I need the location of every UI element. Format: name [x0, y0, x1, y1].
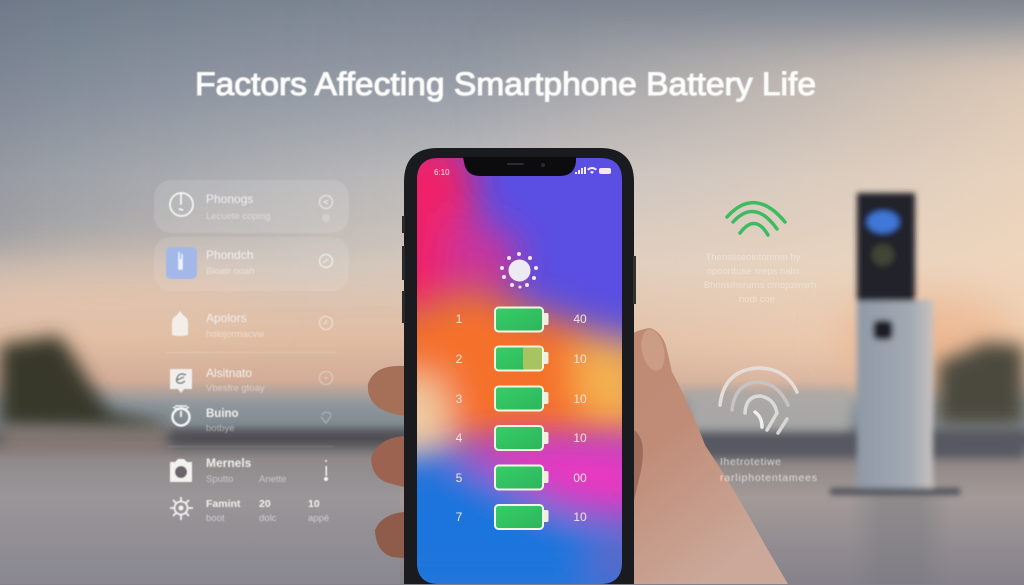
panel: row 1: Lecuete coping: [206, 211, 270, 222]
phone screen gradient: [417, 158, 622, 584]
icon: contactless waves: [720, 368, 797, 433]
row 7: appé: [308, 513, 329, 524]
row 6: Anette: [259, 474, 286, 485]
icon: power gauge: [170, 193, 193, 216]
row 5: [172, 406, 331, 434]
text block: right lower caption: rarliphotentamees: [720, 472, 817, 484]
battery row 5: [456, 466, 587, 490]
row 5: Buino: [206, 408, 239, 420]
battery row 3: [456, 386, 587, 410]
panel: left factor list: [154, 180, 349, 524]
battery row 1: 1: [456, 312, 463, 326]
battery row 3: 10: [573, 392, 587, 406]
battery row 5: 5: [456, 471, 463, 485]
row 3: holojormacvw: [206, 329, 264, 340]
row 6: [170, 456, 328, 485]
icon: camera: [170, 459, 192, 482]
battery row 2: 2: [456, 352, 463, 366]
text block: right description: Bhonsihsrurns cmopzmsrh: [704, 280, 816, 291]
row 6: Sputto: [206, 474, 233, 485]
panel: row 2: Phondch: [206, 248, 253, 262]
charging station: [830, 193, 960, 495]
text block: right description: [704, 252, 816, 305]
row 7: boot: [206, 513, 225, 524]
row 7: Famint: [206, 498, 241, 510]
text block: right description: Thensliseointomnm hy: [705, 252, 801, 263]
battery row 2: 10: [573, 352, 587, 366]
row 4: Vbesfre gtoay: [206, 383, 265, 394]
phone: [402, 148, 636, 584]
row 7: [170, 497, 329, 524]
text block: right lower caption: [720, 456, 817, 484]
text block: right lower caption: Ihetrotetiwe: [720, 456, 781, 468]
battery row 7: 10: [573, 510, 587, 524]
row 3: [172, 311, 332, 340]
icon: blue square: [166, 247, 197, 279]
battery row 1: 40: [573, 312, 587, 326]
hand: fingers on the left: [368, 366, 404, 558]
icon: gear sun: [170, 497, 193, 520]
battery row 5: 00: [573, 471, 587, 485]
row 7: 20: [259, 498, 271, 510]
panel: row 2: [154, 237, 349, 291]
row 5: botbye: [206, 423, 235, 434]
battery row 7: 7: [456, 510, 463, 524]
icon: stopwatch: [172, 406, 190, 426]
phone body: [404, 148, 634, 584]
battery rows: [456, 308, 587, 529]
icon: bottle: [172, 311, 188, 336]
battery row 4: [456, 426, 587, 450]
icon: tag: [170, 369, 192, 393]
panel: row 2: Bloatr ooah: [206, 266, 255, 277]
row 7: dolc: [259, 513, 277, 524]
battery row 2: [456, 346, 587, 370]
icon: green wifi: [727, 203, 785, 235]
battery row 4: 4: [456, 431, 463, 445]
battery row 3: 3: [456, 392, 463, 406]
text block: right description: hodi coe: [739, 294, 775, 305]
title: Factors Affecting Smartphone Battery Life: [195, 66, 816, 102]
battery row 4: 10: [573, 431, 587, 445]
icon: sun: [500, 252, 538, 288]
status bar: [434, 167, 611, 177]
battery row 7: [456, 505, 587, 529]
notch: [463, 157, 576, 176]
row 3: Apolors: [206, 311, 247, 325]
panel: row 1: [154, 180, 349, 233]
panel: row 1: Phonogs: [206, 192, 253, 206]
row 7: 10: [308, 498, 320, 510]
text block: right description: opoorttuse sreps nalis: [707, 266, 800, 277]
row 4: [170, 366, 332, 394]
status bar: 6:10: [434, 168, 450, 177]
row 6: Mernels: [206, 456, 252, 470]
hand: back of hand and thumb: [620, 327, 788, 584]
battery row 1: [456, 308, 587, 332]
row 4: Alsitnato: [206, 366, 252, 380]
